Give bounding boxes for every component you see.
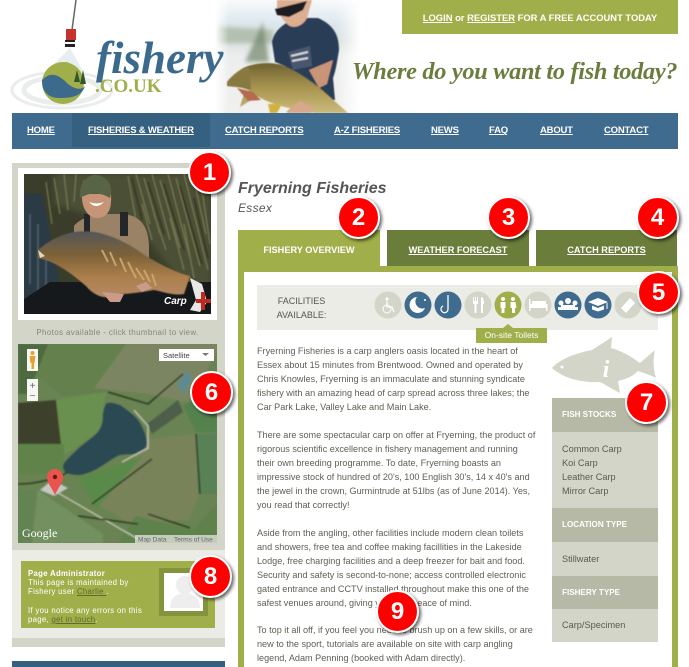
paragraph 2: the jewel in the crown, Gurmintrude at 51lbs (as of June 2014). Yes, xyxy=(257,486,530,496)
tab: weather forecast: WEATHER FORECAST xyxy=(409,245,507,255)
content frame xyxy=(238,266,678,667)
badge 9: 9 xyxy=(391,598,404,625)
badge 8: 8 xyxy=(204,563,217,590)
lower sidebar bar xyxy=(12,661,225,667)
satellite map: + xyxy=(30,381,36,392)
paragraph 3: gated entrance and CCTV installed throughout make this one of the xyxy=(257,584,529,594)
icon: wheelchair xyxy=(374,292,402,318)
badge 7 xyxy=(625,381,668,424)
badge 6 xyxy=(190,371,233,414)
tooltip: on-site toilets xyxy=(476,328,547,343)
facilities label: AVAILABLE: xyxy=(277,310,326,320)
badge 4 xyxy=(636,196,679,239)
fish stocks list: Mirror Carp xyxy=(562,486,608,496)
badge 5 xyxy=(637,271,680,314)
admin text: page, get in touch. xyxy=(28,615,98,624)
paragraph 1: Essex about 15 minutes from Brentwood. Owned and operated by xyxy=(257,360,523,370)
admin text: Page Administrator xyxy=(28,568,105,578)
paragraph 4: new to the sport, tutorials are available on site with carp angling xyxy=(257,639,513,649)
fish stocks list: Koi Carp xyxy=(562,458,598,468)
admin text xyxy=(28,568,142,624)
fish stocks list: Leather Carp xyxy=(562,472,616,482)
location type value: Stillwater xyxy=(562,554,599,564)
navigation bar xyxy=(12,113,678,149)
nav: faq: FAQ xyxy=(489,125,508,136)
photo thumbnail: Carp xyxy=(164,296,187,307)
satellite map: Satellite xyxy=(163,351,190,360)
caption: photos available: Photos available - click thumbnail to view. xyxy=(36,328,199,337)
paragraph 2: you read that correctly! xyxy=(257,500,350,510)
paragraph 3: safest venues around, giving you total peace of mind. xyxy=(257,598,472,608)
tab: weather forecast xyxy=(387,230,529,266)
paragraph 3: Lodge, free charging facilities and a deep freezer for bait and food. xyxy=(257,556,525,566)
paragraph 1: fishery with an amazing head of carp spread across three lakes; the xyxy=(257,388,529,398)
nav: about: ABOUT xyxy=(540,125,573,136)
badge 1 xyxy=(188,151,231,194)
icon: group xyxy=(554,292,582,318)
facility icons xyxy=(374,292,642,318)
paragraph 1 xyxy=(257,346,529,412)
satellite map xyxy=(18,344,217,543)
facilities label: FACILITIES xyxy=(278,296,325,306)
icon: night fishing xyxy=(404,292,432,318)
nav: news: NEWS xyxy=(431,125,459,136)
tab: fishery overview xyxy=(238,230,380,266)
icon: accommodation xyxy=(524,292,552,318)
nav: catch reports: CATCH REPORTS xyxy=(225,125,304,136)
panel: location type heading xyxy=(552,508,658,542)
badge 1: 1 xyxy=(203,159,216,186)
logo: fishery xyxy=(96,33,224,83)
badge 9 xyxy=(376,590,419,633)
icon: toilets xyxy=(494,292,522,318)
map pin xyxy=(47,469,63,495)
text block: description xyxy=(257,346,536,663)
facilities label xyxy=(276,296,326,320)
panel: fishery type heading: FISHERY TYPE xyxy=(562,588,620,597)
logo xyxy=(10,0,224,110)
badge 3: 3 xyxy=(502,204,515,231)
paragraph 2 xyxy=(257,430,536,510)
icon: food xyxy=(464,292,492,318)
title: Fryerning Fisheries xyxy=(238,180,386,197)
paragraph 3: and showers, free tea and coffee making facillities in the Lakeside xyxy=(257,542,522,552)
fishery type value: Carp/Specimen xyxy=(562,620,625,630)
tab: catch reports: CATCH REPORTS xyxy=(567,245,646,255)
panel: fish stocks heading xyxy=(552,398,658,432)
tab: catch reports xyxy=(536,230,677,266)
paragraph 2: impressive stock of hundred of 20's, 100 English 30's, 14 x 40's and xyxy=(257,472,530,482)
panel: left sidebar xyxy=(12,163,225,647)
nav: home: HOME xyxy=(27,125,55,136)
photo: angler holding carp xyxy=(216,0,355,113)
paragraph 3: Security and safety is second-to-none; access controlled electronic xyxy=(257,570,526,580)
panel: fishery type heading xyxy=(552,576,658,609)
admin text: Fishery user Charlie . xyxy=(28,587,109,596)
icon: hook xyxy=(434,292,462,318)
satellite map: − xyxy=(30,391,36,402)
paragraph 3: Aside from the angling, other facilities include modern clean toilets xyxy=(257,528,523,538)
badge 4: 4 xyxy=(651,204,664,231)
icon: tuition xyxy=(584,292,612,318)
badge 3 xyxy=(487,196,530,239)
nav: contact: CONTACT xyxy=(604,125,648,136)
badge 8 xyxy=(189,555,232,598)
avatar xyxy=(159,568,208,616)
fish stocks list: Common Carp xyxy=(562,444,622,454)
fish stocks list xyxy=(552,432,658,508)
panel: location type heading: LOCATION TYPE xyxy=(562,520,627,529)
subtitle: Essex xyxy=(238,201,272,215)
login bar xyxy=(402,0,678,34)
paragraph 2: their own breeding programme. To date, Fryerning boasts an xyxy=(257,458,501,468)
tooltip: on-site toilets: On-site Toilets xyxy=(485,330,538,340)
panel: fish stocks heading: FISH STOCKS xyxy=(562,410,616,419)
nav: fisheries and weather: FISHERIES & WEATHER xyxy=(88,125,194,136)
badge 5: 5 xyxy=(652,279,665,306)
icon: info fish xyxy=(552,337,656,393)
facilities bar xyxy=(257,285,658,330)
badge 6: 6 xyxy=(205,379,218,406)
location type value xyxy=(552,542,658,576)
fishery type value xyxy=(552,609,658,642)
badge 2 xyxy=(337,196,380,239)
logo: .CO.UK xyxy=(95,76,162,97)
login bar: LOGIN or REGISTER FOR A FREE ACCOUNT TODAY xyxy=(423,12,657,23)
badge 7: 7 xyxy=(640,389,653,416)
paragraph 4: legend, Adam Penning (booked with Adam directly). xyxy=(257,653,465,663)
paragraph 4 xyxy=(257,625,533,663)
icon: day tickets xyxy=(614,292,642,318)
paragraph 1: Chris Knowles, Fryerning is an immaculate and stunning syndicate xyxy=(257,374,525,384)
paragraph 1: Car Park Lake, Valley Lake and Main Lake. xyxy=(257,402,431,412)
paragraph 3 xyxy=(257,528,529,608)
nav: a-z fisheries: A-Z FISHERIES xyxy=(334,125,400,136)
admin text: If you notice any errors on this xyxy=(28,606,142,615)
paragraph 2: rigorous scientific excellence in fishery management and running xyxy=(257,444,518,454)
paragraph 2: There are some spectacular carp on offer at Fryerning, the product of xyxy=(257,430,535,440)
paragraph 1: Fryerning Fisheries is a carp anglers oasis located in the heart of xyxy=(257,346,518,356)
tagline: Where do you want to fish today? xyxy=(352,58,677,85)
badge 2: 2 xyxy=(352,204,365,231)
satellite map: Google xyxy=(22,526,57,540)
tab: fishery overview: FISHERY OVERVIEW xyxy=(263,245,355,255)
page administrator box xyxy=(21,561,215,628)
icon: info fish: i xyxy=(603,357,610,383)
paragraph 4: To top it all off, if you feel you need to brush up on a few skills, or are xyxy=(257,625,533,635)
admin text: This page is maintained by xyxy=(28,578,129,587)
photo thumbnail xyxy=(18,168,217,320)
